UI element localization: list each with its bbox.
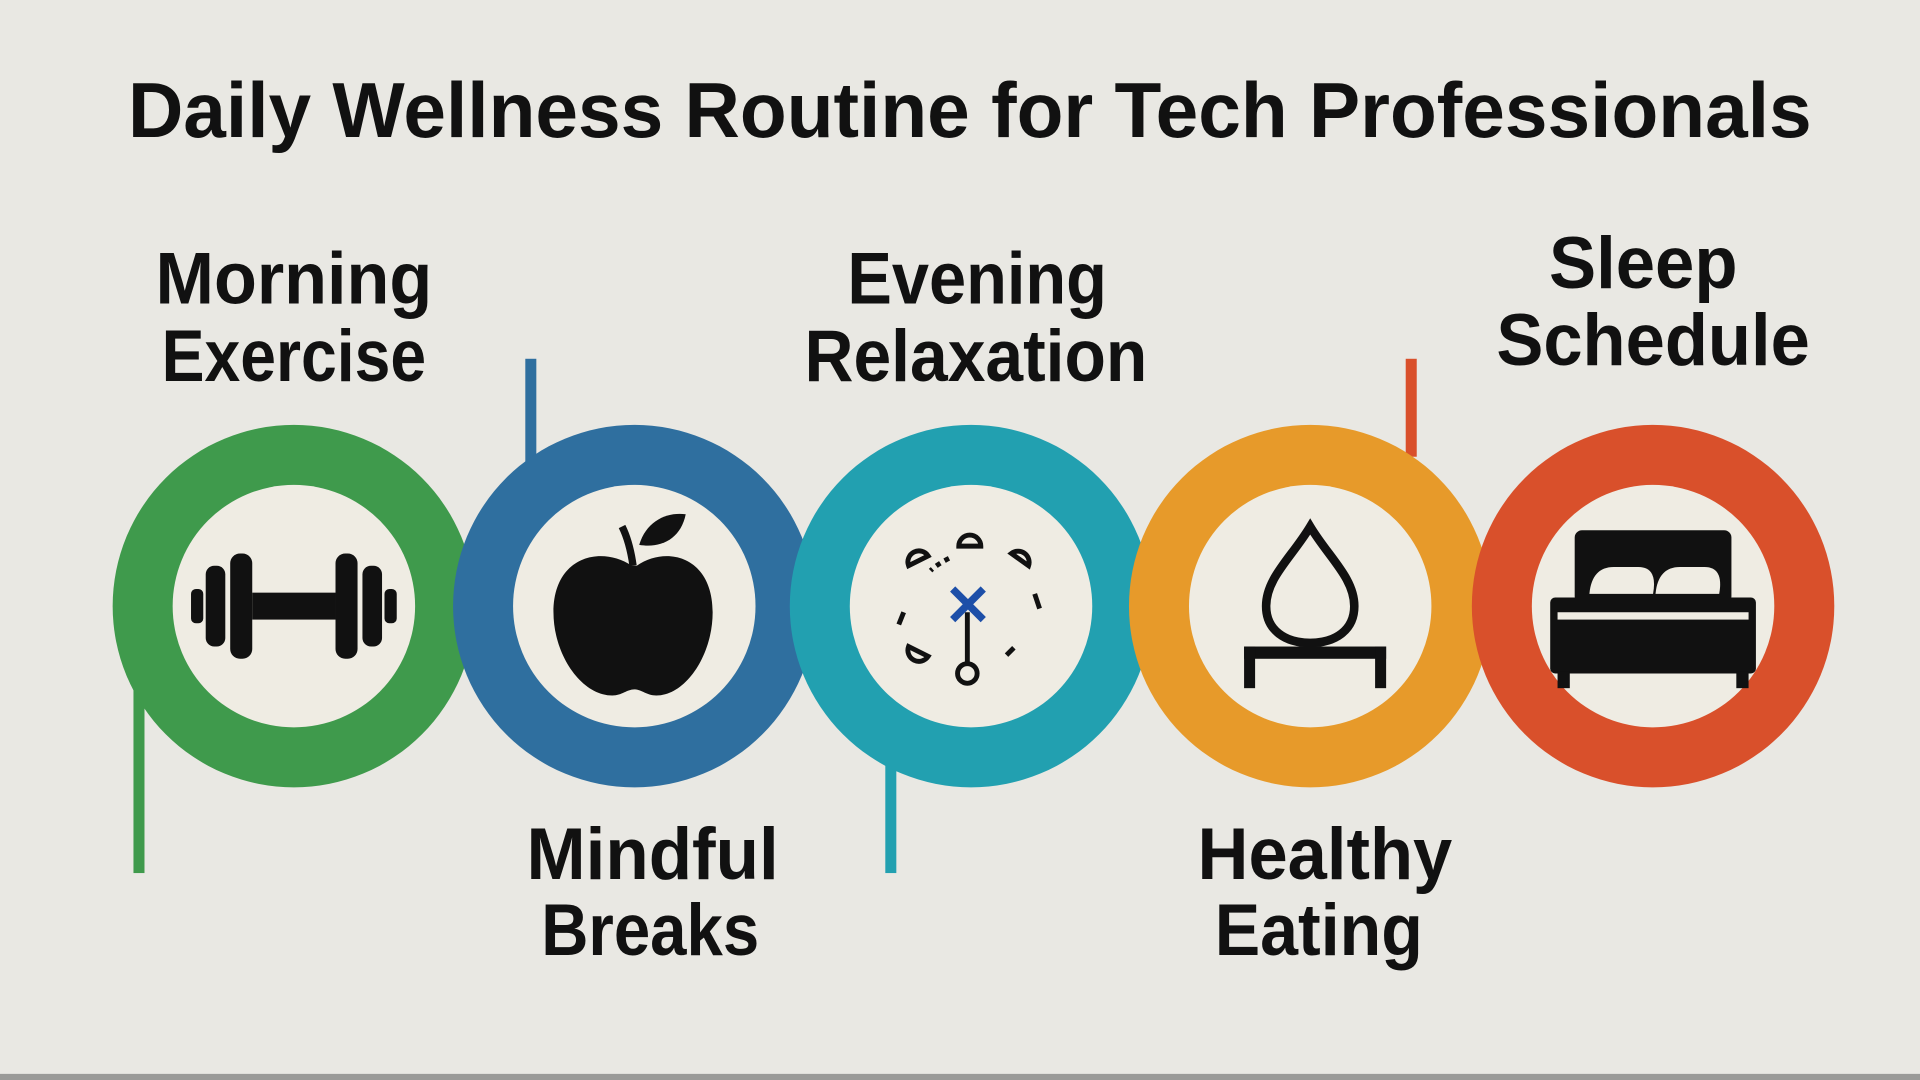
icon: dumbbell (191, 553, 397, 659)
connector line: teal (885, 759, 896, 873)
step 4: healthy eating (1129, 425, 1491, 787)
icon: apple (553, 514, 713, 696)
connector line: blue (525, 359, 536, 463)
text: Schedule (1496, 298, 1810, 381)
label: healthy eating: Healthy (1198, 812, 1452, 895)
icon: water drop on stand (1266, 527, 1354, 643)
icon: bed (1550, 530, 1756, 688)
text: Breaks (541, 888, 759, 971)
text: Exercise (162, 314, 426, 397)
label: mindful breaks: Mindful (527, 812, 779, 895)
title: Daily Wellness Routine for Tech Professionals (128, 66, 1812, 154)
icon: relaxation cycle (899, 535, 1040, 683)
step 1: morning exercise (113, 425, 475, 787)
label: morning exercise: Morning (156, 237, 432, 320)
label: sleep schedule: Sleep (1549, 221, 1738, 304)
connector line: green (133, 686, 144, 873)
text: Relaxation (804, 314, 1147, 397)
step 2: mindful breaks (453, 425, 816, 787)
text: Eating (1215, 888, 1423, 971)
step 5: sleep schedule (1472, 425, 1834, 787)
label: evening relaxation: Evening (847, 237, 1107, 320)
step 3: evening relaxation (790, 425, 1152, 787)
connector line: red (1406, 359, 1417, 457)
